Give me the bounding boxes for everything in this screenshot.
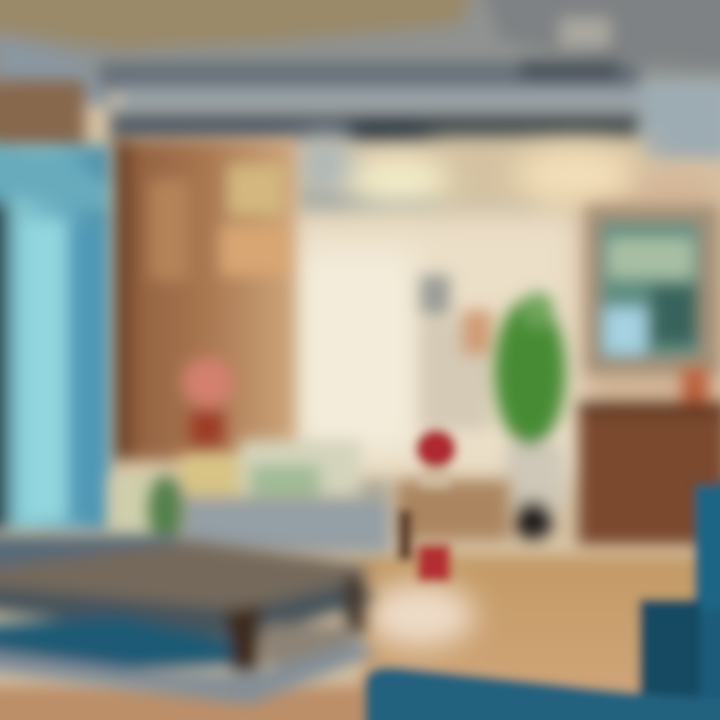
potted plant — [494, 292, 566, 540]
brown upper-left wall — [0, 80, 85, 152]
ceiling beams — [100, 60, 720, 216]
side table with red vases — [395, 430, 510, 581]
coffee table — [0, 535, 375, 705]
floor left strip — [0, 685, 380, 720]
framed painting — [585, 205, 720, 375]
white wall — [290, 140, 720, 480]
green vase on table — [148, 476, 182, 544]
sofa — [110, 440, 390, 555]
blue armchair — [365, 470, 720, 720]
wall art and shelf items — [420, 275, 492, 430]
ceiling lights — [295, 135, 635, 204]
ceiling — [0, 0, 720, 110]
red flowers on wall shelf — [182, 357, 234, 446]
window with curtains — [0, 140, 110, 530]
sideboard cabinet — [578, 368, 720, 545]
floor — [360, 555, 720, 720]
rug highlight — [365, 583, 475, 647]
wood panel wall — [112, 140, 295, 460]
